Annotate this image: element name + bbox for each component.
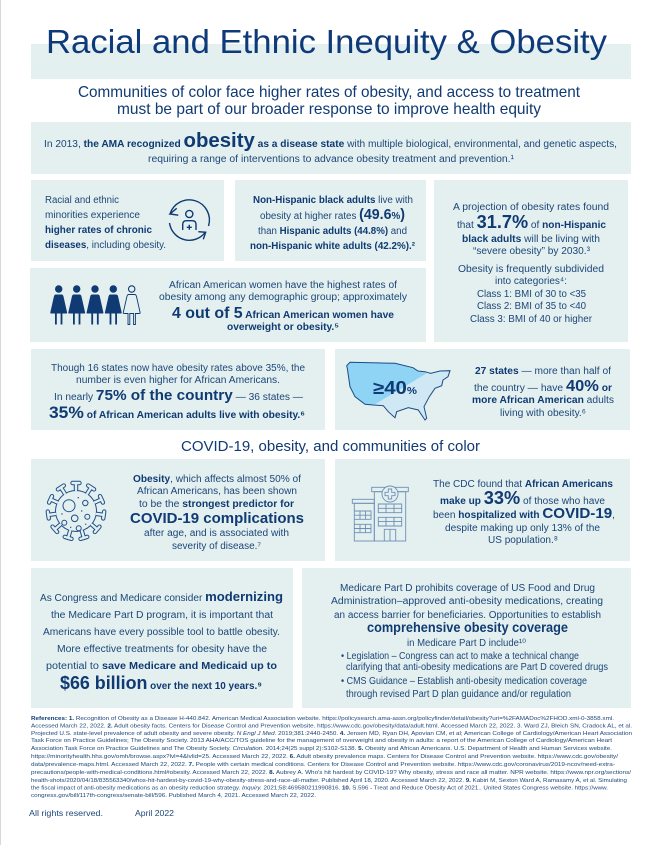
panel: comprehensive obesity coverage: comprehensive obesity coverage [367, 620, 568, 635]
panel: severe obesity projection: that 31.7% of non-Hispanic [457, 212, 606, 232]
map: United States [345, 360, 455, 422]
text: women obesity rates: 4 out of 5 African American women have [172, 305, 394, 322]
panel: severe obesity projection: Class 1: BMI of 30 to <35 [477, 289, 586, 300]
text: 27 states: living with obesity.⁶ [500, 408, 586, 419]
text: COVID-19 complications: African Americans, has been shown [137, 486, 297, 497]
bullet: CMS guidance [341, 676, 587, 700]
title [31, 24, 631, 79]
panel: modernizing Medicare Part D [31, 568, 293, 708]
panel: comprehensive obesity coverage: an access barrier for beneficiaries. Opportunities to establish [334, 610, 601, 621]
text: COVID-19 hospitalization: make up 33% of those who have [440, 488, 605, 508]
references: Projected U.S. state-level prevalence of adult obesity and severe obesity. N Engl J Med. 2019;381:2440-2450. 4. Jensen MD, Ryan DH, Apovian CM, et al; American College of Cardiology/American Heart Association [31, 731, 632, 737]
bullet: CMS guidance: • CMS Guidance – Establish anti-obesity medication coverage [341, 676, 587, 687]
bullet: CMS guidance: through revised Part D plan guidance and/or regulation [346, 689, 571, 700]
footer: rights: All rights reserved. [29, 808, 103, 818]
panel: modernizing Medicare Part D: potential to save Medicare and Medicaid up to [46, 661, 277, 672]
text: women obesity rates [159, 280, 407, 333]
bullet: legislation: clarifying that anti-obesity medications are Part D covered drugs [346, 662, 608, 673]
text: COVID-19 hospitalization: been hospitalized with COVID-19, [433, 505, 615, 522]
subtitle: Communities of color face higher rates of obesity, and access to treatment [78, 84, 581, 101]
footer: date: April 2022 [135, 808, 174, 818]
text: COVID-19 complications: after age, and is associated with [144, 528, 289, 539]
panel: 36 states: 35% of African American adults live with obesity.⁶ [49, 403, 305, 422]
text: COVID-19 complications [130, 474, 304, 552]
heading: COVID-19: COVID-19, obesity, and communities of color [181, 439, 480, 455]
text: women obesity rates: overweight or obesity.⁵ [227, 322, 339, 333]
panel: COVID-19 complications [31, 459, 325, 561]
references [31, 716, 632, 799]
text: chronic diseases: minorities experience [45, 210, 140, 221]
icon: hospital [352, 486, 408, 541]
bullet: legislation: • Legislation – Congress can act to make a technical change [341, 651, 579, 662]
panel: comprehensive obesity coverage: Administration–approved anti-obesity medications, creating [331, 596, 603, 607]
panel: adult obesity rates: than Hispanic adults (44.8%) and [258, 226, 407, 237]
references: https://minorityhealth.hhs.gov/omh/browse.aspx?lvl=4&lvlid=25. Accessed March 22, 2022. 6. Adult obesity prevalence maps. Centers for Disease Control and Prevention website. https://www.cdc.gov/obesity/ [31, 754, 618, 760]
references: the fiscal impact of anti-obesity medications as an obesity reduction strategy. Inquiry. 2021;58:469580211990816. 10. S.596 - Treat and Reduce Obesity Act of 2021.. United States Congress website. https://www. [31, 786, 608, 792]
panel: severe obesity projection: “severe obesity” by 2030.³ [473, 246, 591, 257]
panel: chronic diseases [31, 180, 224, 261]
panel: adult obesity rates: obesity at higher rates (49.6%) [260, 207, 405, 223]
panel: severe obesity projection: Class 2: BMI of 35 to <40 [477, 301, 586, 312]
references: data/prevalence-maps.html. Accessed March 22, 2022. 7. People with certain medical conditions. Centers for Disease Control and Prevention website. https://www.cdc.gov/coronavirus/2019-ncov/need-extra- [31, 762, 615, 768]
references: Accessed March 22, 2022. 2. Adult obesity facts. Centers for Disease Control and Prevention website. https://www.cdc.gov/obesity/data/adult.html. Accessed March 22, 2022. 3. Ward ZJ, Bleich SN, Cradock AL, et al. [31, 724, 632, 730]
panel: severe obesity projection [434, 180, 628, 342]
panel: 27 states [335, 349, 630, 430]
text: COVID-19 hospitalization: The CDC found that African Americans [433, 479, 613, 490]
panel: African American women [30, 268, 426, 342]
text: women obesity rates: African American women have the highest rates of [169, 280, 397, 291]
panel: adult obesity rates: non-Hispanic white adults (42.2%).² [250, 241, 416, 252]
panel: modernizing Medicare Part D: the Medicare Part D program, it is important that [51, 610, 273, 621]
references: health-shots/2020/04/18/835563340/whos-hit-hardest-by-covid-19-why-obesity-stress-and-race-all-matter. Published April 18, 2020. Accessed March 22, 2022. 9. Kabiri M, Sexton Ward A, Ramasamy A, et al. Simulating [31, 778, 627, 784]
panel: severe obesity projection: into categories⁴: [495, 276, 567, 287]
panel: 36 states [31, 349, 325, 430]
panel: comprehensive obesity coverage: in Medicare Part D include¹⁰ [407, 638, 526, 649]
subtitle: must be part of our broader response to improve health equity [117, 101, 541, 118]
icon: virus [48, 483, 104, 539]
text: chronic diseases: higher rates of chronic [45, 225, 152, 236]
text: 27 states: more African American adults [472, 395, 614, 406]
text: COVID-19 hospitalization: despite making up only 13% of the [445, 523, 600, 534]
references: congress.gov/bill/117th-congress/senate-bill/596. Published March 4, 2021. Accessed March 22, 2022. [31, 793, 316, 799]
text: chronic diseases: diseases, including obesity. [45, 240, 166, 251]
text: chronic diseases: Racial and ethnic [45, 195, 119, 206]
text: COVID-19 complications: severity of disease.⁷ [172, 541, 261, 552]
bullet: legislation [341, 651, 608, 673]
panel: adult obesity rates [235, 180, 426, 261]
panel: severe obesity projection: A projection of obesity rates found [453, 202, 609, 213]
text: 27 states: the country — have 40% or [474, 378, 612, 395]
text: COVID-19 complications: COVID-19 complications [130, 510, 304, 527]
text: 27 states: 27 states — more than half of [475, 366, 611, 377]
panel: modernizing Medicare Part D: More effective treatments for obesity have the [57, 644, 267, 655]
text: 27 states [472, 366, 614, 419]
panel: 36 states: number is even higher for African Americans. [76, 375, 280, 386]
panel: modernizing Medicare Part D: As Congress and Medicare consider modernizing [40, 589, 283, 604]
icon: person with circular arrows [170, 200, 209, 240]
panel: severe obesity projection: Obesity is frequently subdivided [458, 264, 604, 275]
panel: modernizing Medicare Part D: $66 billion over the next 10 years.⁹ [60, 673, 262, 693]
map: United States: ≥40 % [373, 378, 417, 398]
text: women obesity rates: obesity among any demographic group; approximately [159, 292, 407, 303]
references: References: 1. Recognition of Obesity as a Disease H-440.842. American Medical Association website. https://policysearch.ama-assn.org/policyfinder/detail/obesity?uri=%2FAMADoc%2FHOD.xml-0-3858.xml. [31, 716, 614, 722]
panel: comprehensive obesity coverage: Medicare Part D prohibits coverage of US Food and Drug [340, 583, 595, 594]
text: COVID-19 complications: Obesity, which affects almost 50% of [133, 474, 301, 485]
text: chronic diseases [45, 195, 166, 251]
panel: adult obesity rates: Non-Hispanic black adults live with [253, 195, 413, 206]
text: COVID-19 hospitalization: US population.⁸ [488, 535, 558, 546]
icon: five women, four filled [50, 285, 140, 324]
panel: modernizing Medicare Part D: Americans have every possible tool to battle obesity. [43, 627, 280, 638]
references: Association Task Force on Practice Guidelines and The Obesity Society. Circulation. 2014;24(25 suppl 2):S102-S138. 5. Obesity and African Americans. U.S. Department of Health and Human Services website. [31, 746, 612, 752]
title: Racial and Ethnic Inequity & Obesity [46, 24, 607, 61]
panel: comprehensive obesity coverage [302, 568, 631, 708]
panel: AMA recognition [31, 122, 631, 174]
panel: AMA recognition: requiring a range of interventions to advance obesity treatment and prevention.¹ [148, 154, 515, 165]
panel: 36 states: In nearly 75% of the country — 36 states — [54, 387, 303, 404]
subtitle [78, 84, 581, 118]
panel: COVID-19 hospitalization [335, 459, 630, 561]
references: Task Force on Practice Guidelines; The Obesity Society. 2013 AHA/ACC/TOS guideline for the management of overweight and obesity in adults: a report of the American College of Cardiology/American Heart [31, 738, 612, 744]
references: precautions/people-with-medical-conditions.html#obesity. Accessed March 22, 2022. 8. Aubrey A. Who's hit hardest by COVID-19? Why obesity, stress and race all matter. NPR website. https://www.npr.org/sections/ [31, 770, 631, 776]
text: COVID-19 hospitalization [433, 479, 615, 546]
panel: AMA recognition: In 2013, the AMA recognized obesity as a disease state with multiple biological, environmental, and genetic aspects, [44, 130, 617, 152]
text: COVID-19 complications: to be the strongest predictor for [139, 499, 294, 510]
panel: severe obesity projection: Class 3: BMI of 40 or higher [470, 314, 593, 325]
panel: 36 states: Though 16 states now have obesity rates above 35%, the [51, 363, 305, 374]
panel: severe obesity projection: black adults will be living with [462, 234, 600, 245]
